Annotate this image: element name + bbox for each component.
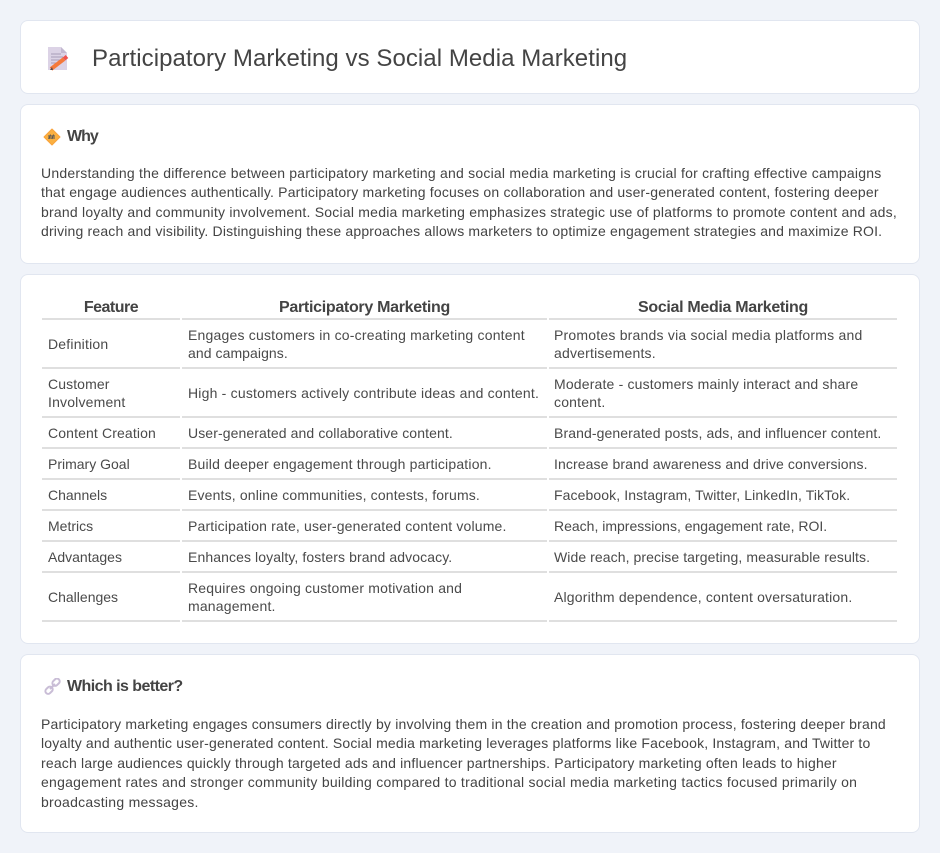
text: Involvement [48,394,125,410]
text: driving reach and visibility. Distinguishing these approaches allows marketers to optimize engagement strategies and maximize ROI. [41,223,882,239]
text: Wide reach, precise targeting, measurable results. [554,549,870,565]
text block: which is better [41,716,886,810]
text: Understanding the difference between participatory marketing and social media marketing is crucial for crafting effective campaigns [41,165,881,181]
text: Facebook, Instagram, Twitter, LinkedIn, TikTok. [554,487,850,503]
text: High - customers actively contribute ideas and content. [188,385,539,401]
text: Events, online communities, contests, forums. [188,487,480,503]
text: Participatory marketing engages consumers directly by involving them in the creation and promotion process, fostering deeper brand [41,716,886,732]
table row: content creation [48,425,881,441]
table row: advantages [48,549,870,565]
heading: which is better: Which is better? [67,678,183,695]
text: Social Media Marketing [638,299,808,316]
text: that engage audiences authentically. Participatory marketing focuses on collaboration and user-generated content, fostering deeper [41,184,879,200]
text: Primary Goal [48,456,130,472]
text: Feature [84,299,138,316]
text: Channels [48,487,107,503]
panel: why [20,104,920,264]
text: Challenges [48,589,118,605]
text: Advantages [48,549,122,565]
text: loyalty and authentic user-generated content. Social media marketing leverages platforms like Facebook, Instagram, and Twitter to [41,735,870,751]
text: User-generated and collaborative content. [188,425,453,441]
text: Build deeper engagement through participation. [188,456,492,472]
title: Participatory Marketing vs Social Media Marketing [92,45,627,72]
text: Definition [48,336,108,352]
icon: warning diamond [44,128,60,146]
panel: header [20,20,920,94]
panel: comparison table [20,274,920,644]
table row: channels [48,487,850,503]
text: management. [188,598,276,614]
table row: challenges [48,580,852,614]
text block: why [41,165,897,239]
text: Content Creation [48,425,156,441]
text: and campaigns. [188,345,288,361]
text: Reach, impressions, engagement rate, ROI. [554,518,827,534]
text: Participatory Marketing [279,299,450,316]
text: Algorithm dependence, content oversaturation. [554,589,852,605]
text: content. [554,394,605,410]
text: brand loyalty and community involvement. Social media marketing emphasizes strategic use of platforms to promote content and ads, [41,204,897,220]
text: Requires ongoing customer motivation and [188,580,462,596]
icon: chain link [44,678,61,695]
text: Moderate - customers mainly interact and share [554,376,858,392]
text: Participation rate, user-generated content volume. [188,518,507,534]
text: Enhances loyalty, fosters brand advocacy. [188,549,452,565]
text: Customer [48,376,109,392]
table header [84,299,808,316]
table row: definition [48,327,862,361]
panel: which is better [20,654,920,833]
text: Metrics [48,518,93,534]
text: Increase brand awareness and drive conversions. [554,456,868,472]
icon: document with pencil [48,47,68,71]
table row: primary goal [48,456,868,472]
table rules [42,318,897,622]
table row: metrics [48,518,827,534]
text: broadcasting messages. [41,794,199,810]
text: reach large audiences quickly through targeted ads and influencer partnerships. Participatory marketing often leads to higher [41,755,837,771]
text: Brand-generated posts, ads, and influencer content. [554,425,881,441]
text: advertisements. [554,345,656,361]
text: Promotes brands via social media platforms and [554,327,862,343]
table row: customer involvement [48,376,858,410]
heading: why: Why [67,128,98,145]
text: Engages customers in co-creating marketing content [188,327,525,343]
text: engagement rates and stronger community building compared to traditional social media marketing tactics focused primarily on [41,774,857,790]
